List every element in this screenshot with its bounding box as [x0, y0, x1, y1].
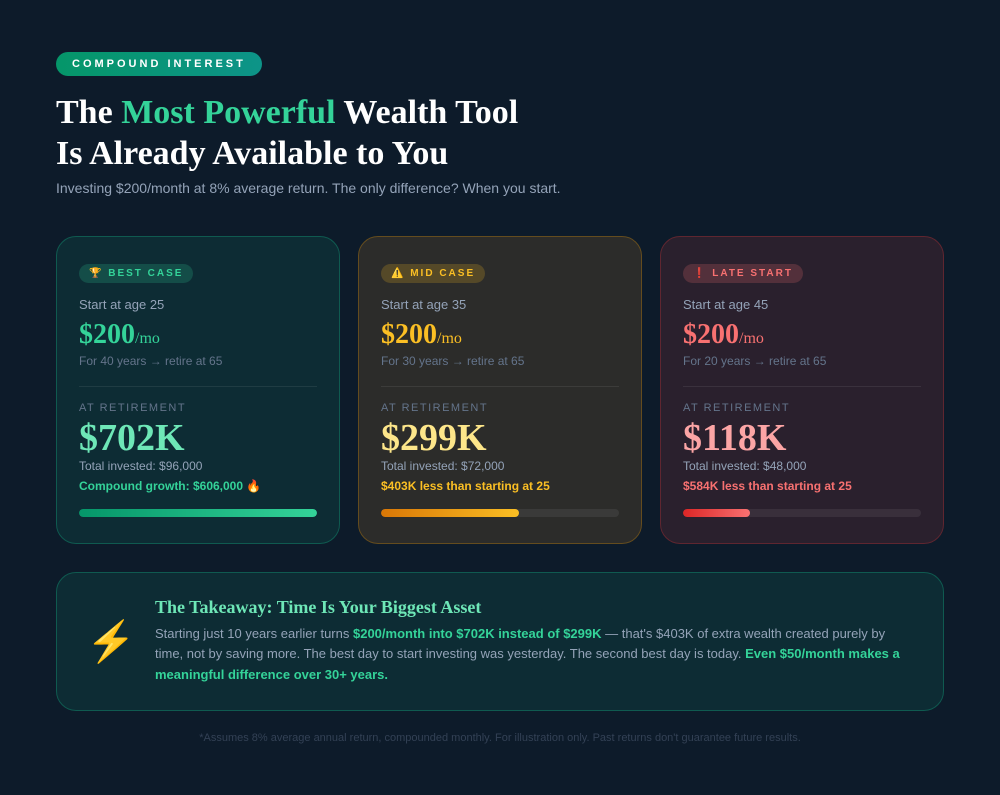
retirement value: $702K [79, 417, 185, 459]
monthly amount: $200/mo [683, 319, 764, 350]
progress bar [79, 509, 317, 517]
at retirement label: AT RETIREMENT [683, 402, 790, 414]
tag: late start [683, 264, 803, 283]
tag: best case: 🏆 BEST CASE [89, 268, 183, 279]
subtitle: Investing $200/month at 8% average return. The only difference? When you start. [56, 180, 561, 196]
growth note: Compound growth: $606,000 🔥 [79, 479, 261, 493]
panel: late start [660, 236, 944, 544]
tag: mid case [381, 264, 485, 283]
duration: For 40 years → retire at 65 [79, 354, 222, 368]
difference note: $584K less than starting at 25 [683, 479, 852, 493]
tag: best case [79, 264, 193, 283]
progress bar [683, 509, 921, 517]
monthly amount: $200/mo [381, 319, 462, 350]
footnote: *Assumes 8% average annual return, compounded monthly. For illustration only. Past returns don't guarantee future results. [199, 732, 801, 744]
takeaway text: Starting just 10 years earlier turns $200/month into $702K instead of $299K — that's $403K of extra wealth created purely by time, not by saving more. The best day to start investing was yesterday. The second best day is today. Even $50/month makes a meaningful difference over 30+ years. [155, 626, 900, 682]
tag: late start: ❗ LATE START [693, 268, 793, 279]
total invested: Total invested: $96,000 [79, 459, 202, 473]
total invested: Total invested: $72,000 [381, 459, 504, 473]
progress bar [381, 509, 619, 517]
title: Is Already Available to You [56, 135, 448, 172]
takeaway heading: The Takeaway: Time Is Your Biggest Asset [155, 597, 481, 617]
panel: takeaway [56, 572, 944, 711]
retirement value: $118K [683, 417, 786, 459]
at retirement label: AT RETIREMENT [79, 402, 186, 414]
at retirement label: AT RETIREMENT [381, 402, 488, 414]
monthly amount: $200/mo [79, 319, 160, 350]
retirement value: $299K [381, 417, 487, 459]
panel: best case [56, 236, 340, 544]
icon: lightning bolt: ⚡ [86, 620, 136, 664]
tag: mid case: ⚠️ MID CASE [391, 268, 475, 279]
start age: Start at age 25 [79, 297, 164, 312]
start age: Start at age 35 [381, 297, 466, 312]
badge: compound interest [56, 52, 262, 76]
duration: For 30 years → retire at 65 [381, 354, 524, 368]
title [56, 94, 518, 172]
badge: compound interest: COMPOUND INTEREST [72, 58, 246, 70]
start age: Start at age 45 [683, 297, 768, 312]
title: The Most Powerful Wealth Tool [56, 94, 518, 131]
duration: For 20 years → retire at 65 [683, 354, 826, 368]
panel: mid case [358, 236, 642, 544]
total invested: Total invested: $48,000 [683, 459, 806, 473]
difference note: $403K less than starting at 25 [381, 479, 550, 493]
